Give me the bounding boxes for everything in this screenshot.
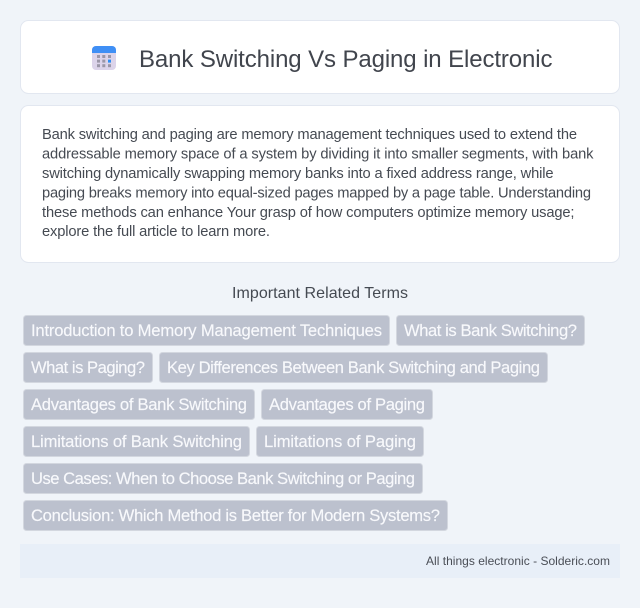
pill: what is bank switching: What is Bank Switching?: [404, 321, 577, 340]
pill: use cases: [24, 464, 422, 494]
pill: advantages of paging: Advantages of Paging: [269, 395, 425, 414]
title: Bank Switching Vs Paging in Electronic: [139, 46, 552, 73]
pill: limitations of bank switching: [24, 426, 250, 456]
pill: key differences: [160, 352, 548, 382]
pill: introduction: Introduction to Memory Management Techniques: [31, 321, 382, 340]
panel: header: [20, 20, 620, 94]
text block: description paragraph: addressable memory space of a system by dividing it into smaller segments, with bank: [42, 146, 594, 162]
text block: description paragraph: these methods can enhance Your grasp of how computers optimize memory usage;: [42, 205, 574, 221]
icon: calendar: [92, 46, 116, 70]
pill: conclusion: Conclusion: Which Method is Better for Modern Systems?: [31, 506, 440, 525]
pill: limitations of bank switching: Limitations of Bank Switching: [31, 432, 242, 451]
text block: description paragraph: switching dynamically swapping memory banks into a fixed address range, while: [42, 166, 554, 182]
panel: description: [20, 106, 620, 262]
text block: description paragraph: Bank switching and paging are memory management techniques used to extend the: [42, 127, 577, 143]
text block: description paragraph: paging breaks memory into equal-sized pages mapped by a page table. Understanding: [42, 186, 591, 202]
pill: what is paging: What is Paging?: [31, 358, 145, 377]
pill: conclusion: [24, 500, 448, 530]
pill: limitations of paging: Limitations of Paging: [264, 432, 416, 451]
pill: what is paging: [24, 352, 152, 382]
footer credit: All things electronic - Solderic.com: [426, 554, 610, 568]
footer: [20, 544, 620, 578]
pill: key differences: Key Differences Between Bank Switching and Paging: [167, 358, 540, 377]
pill: advantages of bank switching: Advantages of Bank Switching: [31, 395, 247, 414]
pill: introduction: [24, 316, 390, 346]
pill: limitations of paging: [256, 426, 424, 456]
text block: description paragraph: explore the full article to learn more.: [42, 224, 270, 240]
pill: use cases: Use Cases: When to Choose Bank Switching or Paging: [31, 469, 415, 488]
pill: what is bank switching: [396, 316, 584, 346]
pill: advantages of bank switching: [24, 390, 254, 420]
heading: important related terms: Important Related Terms: [232, 285, 408, 302]
text block: description paragraph: [42, 127, 594, 240]
pill: advantages of paging: [262, 390, 432, 420]
